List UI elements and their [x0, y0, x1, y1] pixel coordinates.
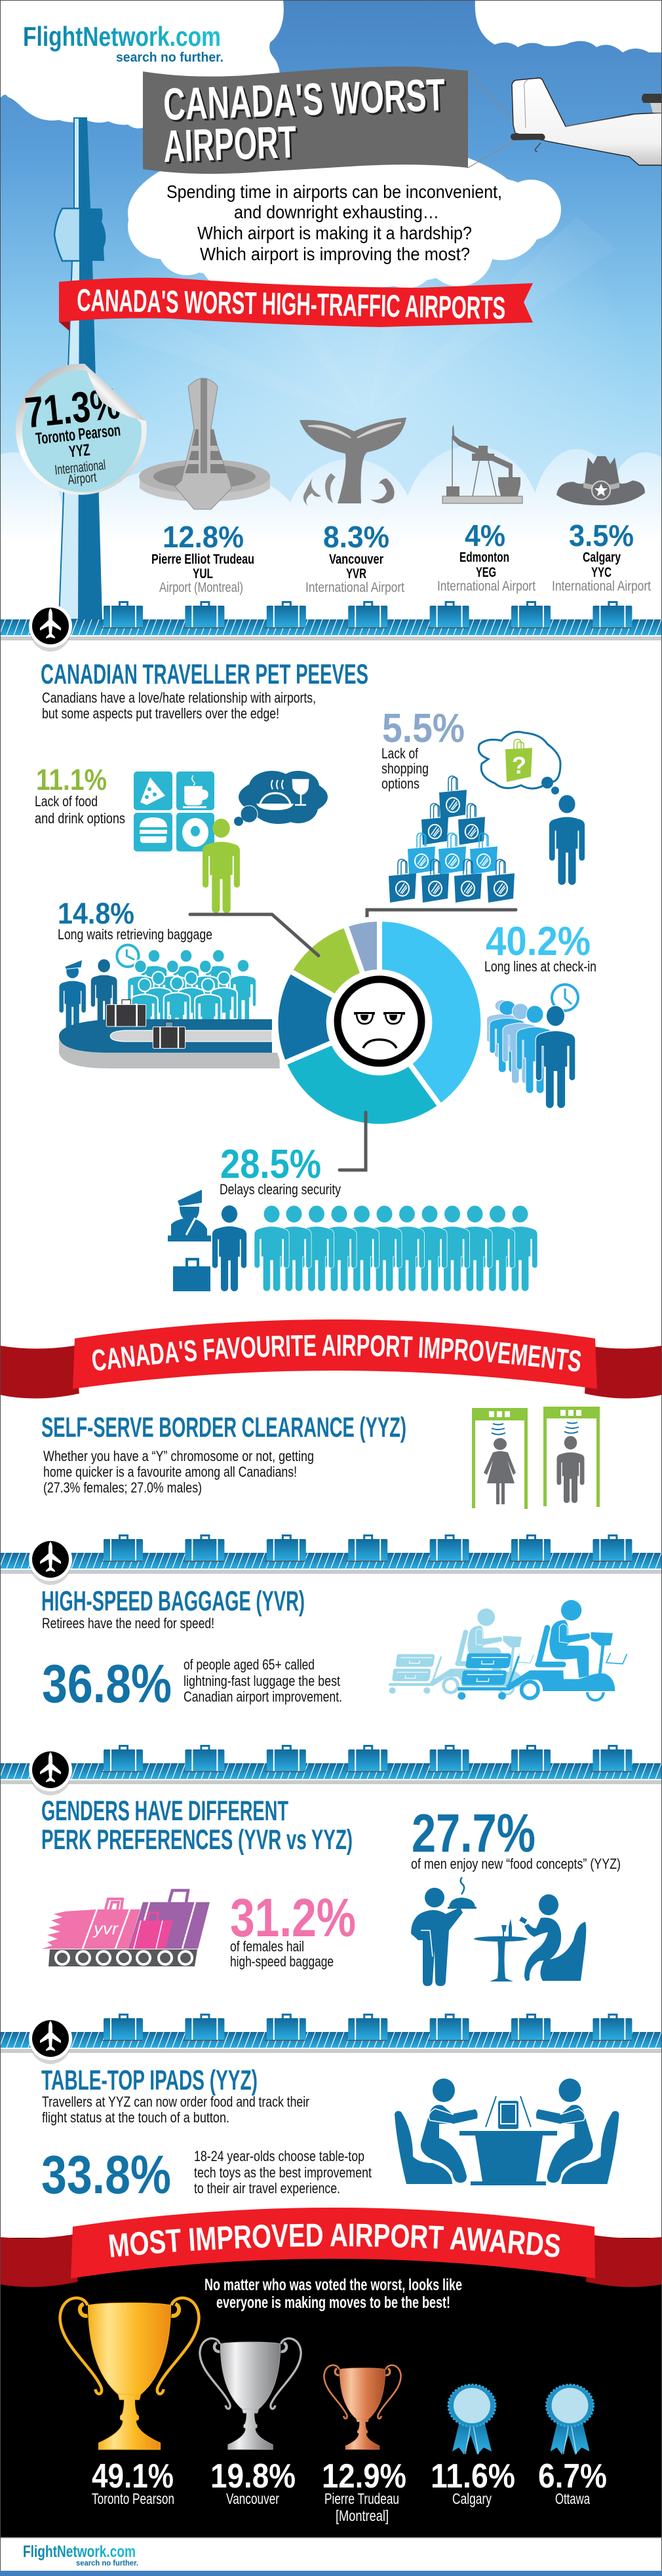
callout lines and baggage label — [58, 897, 516, 943]
callout: shopping 5.5%: shopping — [381, 760, 429, 777]
heading: table-top ipads: TABLE-TOP IPADS (YYZ) — [41, 2065, 258, 2096]
stat: Edmonton 4%: 4% — [465, 518, 505, 553]
icon: Montreal Olympic stadium — [139, 378, 270, 509]
border clearance text: home quicker is a favourite among all Canadians! — [43, 1464, 297, 1480]
segment 14.8% baggage — [276, 971, 336, 1063]
callout: shopping 5.5%: Lack of — [381, 745, 419, 762]
sticker: Toronto Pearson 71.3%: YYZ — [68, 440, 91, 461]
stat: Vancouver 8.3%: Vancouver — [329, 552, 383, 567]
award: Pierre Trudeau: [Montreal] — [336, 2507, 389, 2524]
callout: security 28.5%: Delays clearing security — [220, 1181, 341, 1198]
carousel belt — [59, 1019, 280, 1068]
stat: Edmonton 4%: YEG — [476, 565, 496, 580]
pet peeves intro: Canadians have a love/hate relationship with airports, — [42, 690, 316, 706]
sticker: Toronto Pearson 71.3% — [16, 364, 147, 495]
callout: shopping 5.5%: options — [381, 775, 419, 792]
illustration: check-in queue — [487, 985, 578, 1108]
trophy: gold — [60, 2298, 199, 2449]
cafe table — [474, 1919, 528, 1981]
right seated person — [536, 2078, 619, 2184]
segment 28.5% security — [284, 1042, 440, 1127]
award: Calgary: Calgary — [452, 2490, 492, 2507]
callout: food 11.1%: Lack of food — [35, 793, 98, 810]
icon: food tiles — [134, 771, 214, 851]
callout: food 11.1%: and drink options — [35, 810, 125, 827]
logo: FlightNetwork.com: search no further. — [116, 50, 224, 65]
award: Pierre Trudeau — [322, 2457, 406, 2524]
intro text: Which airport is making it a hardship? — [197, 223, 472, 243]
pet peeves intro: but some aspects put travellers over the edge! — [42, 705, 279, 722]
icon: dining thought bubble — [234, 771, 328, 826]
sky background — [0, 0, 662, 524]
diner — [519, 1894, 586, 1981]
footer logo: search no further. — [76, 2558, 138, 2567]
stat: 33.8%: 18-24 year-olds choose table-top — [194, 2148, 364, 2164]
stat: 36.8%: lightning-fast luggage the best — [184, 1673, 340, 1689]
ipad — [486, 2096, 531, 2129]
donut chart: pet peeves — [276, 919, 483, 1127]
stat: 36.8%: of people aged 65+ called — [184, 1656, 315, 1673]
awards intro text: everyone is making moves to be the best! — [216, 2293, 450, 2312]
award: Toronto Pearson: 49.1% — [92, 2457, 174, 2495]
stat: 33.8%: 33.8% — [41, 2144, 171, 2205]
border clearance text: Whether you have a “Y” chromosome or not, getting — [43, 1448, 314, 1464]
icon: pyramid of shopping bags — [389, 776, 515, 903]
title: CANADA'S WORST — [163, 69, 446, 130]
stat: 36.8%: Canadian airport improvement. — [184, 1688, 342, 1705]
icon: shopping thought bubble: ? — [512, 752, 526, 779]
icon: oil pump jack — [442, 425, 522, 503]
black awards panel — [0, 2238, 662, 2537]
conveyor divider 3 — [0, 1745, 662, 1795]
stat: 31.2% females: high-speed baggage — [230, 1953, 334, 1970]
cloud: top right — [475, 0, 662, 52]
footer bar — [0, 2571, 662, 2576]
left seated person — [395, 2078, 478, 2184]
waiting crowd — [127, 949, 256, 1044]
callout: check-in 40.2%: 40.2% — [486, 919, 591, 964]
stat: Montreal 12.8%: 12.8% — [163, 520, 244, 554]
callout line: food to chart — [190, 914, 319, 956]
icon: man in scanner gate — [543, 1407, 600, 1507]
award: Calgary — [431, 2457, 515, 2507]
ribbon: favourite airport improvements: CANADA'S FAVOURITE AIRPORT IMPROVEMENTS — [92, 1335, 581, 1371]
title — [163, 69, 448, 174]
table-top text — [42, 2094, 309, 2126]
waiter — [411, 1877, 477, 1986]
award: Ottawa — [538, 2457, 607, 2507]
intro text — [166, 182, 502, 264]
callout: security 28.5% — [220, 1112, 366, 1198]
title: AIRPORT — [165, 119, 299, 174]
passenger at carousel — [91, 959, 117, 1025]
high-speed baggage text: Retirees have the need for speed! — [42, 1615, 214, 1631]
red banner: worst high-traffic airports — [59, 278, 533, 331]
passenger at desk — [212, 1205, 246, 1291]
heading: genders perk preferences: GENDERS HAVE DIFFERENT — [41, 1795, 288, 1827]
illustration: pink luggage on belt: yvr — [92, 1920, 119, 1938]
conveyor divider 4 — [0, 2014, 662, 2064]
teal queue — [254, 1205, 537, 1291]
conveyor divider 1 — [0, 601, 662, 652]
heading: genders perk preferences: PERK PREFERENCES (YVR vs YYZ) — [41, 1824, 353, 1856]
stat: Calgary 3.5%: 3.5% — [569, 518, 634, 553]
illustration: mobility scooters with luggage — [389, 1600, 627, 1700]
grey title banner — [143, 66, 468, 174]
officer at carousel — [59, 960, 86, 1030]
stat: 27.7% men: of men enjoy new “food concepts” (YYZ) — [411, 1856, 621, 1872]
callout lines and baggage label: 14.8% — [58, 897, 134, 930]
footer logo: FlightNetwork.com — [23, 2543, 136, 2561]
stat: 36.8%: 36.8% — [42, 1653, 172, 1714]
medal: Ottawa — [547, 2385, 594, 2455]
sticker: Toronto Pearson 71.3%: 71.3% — [23, 379, 123, 437]
illustration: security line — [168, 1190, 537, 1291]
stat: Edmonton 4% — [437, 518, 535, 594]
cloud: top left — [0, 0, 284, 128]
border clearance text — [43, 1448, 314, 1496]
stat: Montreal 12.8% — [151, 520, 254, 595]
title: CANADA'S WORST — [165, 71, 448, 132]
conveyor divider 2 — [0, 1534, 662, 1585]
segment 11.1% food — [290, 925, 363, 997]
stat: 33.8%: to their air travel experience. — [194, 2180, 340, 2196]
award: Ottawa: Ottawa — [555, 2490, 590, 2507]
CN tower — [54, 118, 106, 619]
callout: shopping 5.5%: 5.5% — [382, 706, 465, 751]
stat: Calgary 3.5%: Calgary — [583, 550, 621, 565]
sticker: Toronto Pearson 71.3%: Toronto Pearson — [35, 421, 121, 448]
heading: self-serve border clearance: SELF-SERVE BORDER CLEARANCE (YYZ) — [41, 1412, 406, 1443]
intro text: and downright exhausting… — [234, 202, 439, 222]
logo: FlightNetwork.com — [23, 21, 224, 65]
intro text: Spending time in airports can be inconvenient, — [166, 182, 502, 202]
ribbon: most improved airport awards: MOST IMPROVED AIRPORT AWARDS — [109, 2223, 560, 2257]
sticker: Toronto Pearson 71.3%: Airport — [67, 470, 98, 488]
stat: Vancouver 8.3%: International Airport — [305, 580, 404, 595]
callout: food 11.1% — [35, 763, 125, 827]
logo: FlightNetwork.com: FlightNetwork.com — [23, 21, 221, 52]
awards intro text — [204, 2276, 462, 2312]
plane — [468, 71, 662, 168]
award: Toronto Pearson: Toronto Pearson — [92, 2490, 174, 2507]
award: Vancouver — [210, 2457, 296, 2507]
trophy: bronze — [324, 2365, 401, 2449]
title: AIRPORT — [163, 117, 297, 172]
icon: woman in scanner gate — [472, 1408, 528, 1509]
callout: security 28.5%: 28.5% — [220, 1142, 321, 1187]
footer logo — [0, 2537, 662, 2567]
heading: pet peeves: CANADIAN TRAVELLER PET PEEVES — [41, 659, 368, 690]
award: Vancouver: Vancouver — [226, 2490, 279, 2507]
cloud: behind intro text — [128, 136, 561, 290]
stat: Calgary 3.5%: YYC — [591, 565, 612, 580]
heading: high-speed baggage: HIGH-SPEED BAGGAGE (YVR) — [41, 1586, 305, 1617]
stat: Calgary 3.5% — [552, 518, 651, 594]
clock icon — [117, 945, 139, 967]
segment 5.5% shopping — [345, 919, 380, 975]
border clearance text: (27.3% females; 27.0% males) — [43, 1479, 202, 1496]
icon: shopping thought bubble — [478, 732, 560, 794]
callout: shopping 5.5% — [381, 706, 465, 792]
callout lines and baggage label: Long waits retrieving baggage — [58, 926, 212, 943]
awards intro text: No matter who was voted the worst, looks like — [204, 2276, 462, 2294]
trophy: silver — [200, 2339, 301, 2449]
award: Ottawa: 6.7% — [538, 2457, 607, 2495]
stat: Edmonton 4%: International Airport — [437, 579, 535, 594]
icon: unhappy face — [338, 979, 421, 1063]
pet peeves intro — [42, 690, 316, 722]
heading: genders perk preferences — [41, 1795, 353, 1856]
table-top text: flight status at the touch of a button. — [42, 2109, 229, 2126]
illustration: baggage carousel and crowd — [59, 945, 280, 1068]
stat: Montreal 12.8%: Airport (Montreal) — [159, 580, 243, 595]
award: Calgary: 11.6% — [431, 2457, 515, 2495]
award: Vancouver: 19.8% — [210, 2457, 296, 2495]
stat: Vancouver 8.3%: 8.3% — [323, 520, 389, 554]
stat: 27.7% men — [411, 1803, 621, 1872]
security officer — [168, 1190, 211, 1241]
icon: whale tail — [300, 418, 406, 506]
ribbon: most improved airport awards — [1, 2208, 661, 2288]
stat: Vancouver 8.3%: YVR — [346, 566, 366, 581]
sticker: Toronto Pearson 71.3%: International — [54, 458, 106, 478]
stat: Montreal 12.8%: YUL — [193, 566, 213, 581]
callout: check-in 40.2%: Long lines at check-in — [484, 958, 596, 975]
illustration: waiter and diner — [411, 1877, 586, 1986]
icon: green man thinking of food — [203, 819, 240, 913]
award: Pierre Trudeau: 12.9% — [322, 2457, 406, 2495]
stat: Edmonton 4%: Edmonton — [459, 550, 509, 565]
suitcases on carousel — [106, 1000, 185, 1048]
award: Toronto Pearson — [92, 2457, 174, 2507]
ribbon: favourite airport improvements — [1, 1319, 661, 1399]
icon: cowboy hat — [556, 456, 645, 505]
table-top text: Travellers at YYZ can now order food and track their — [42, 2094, 309, 2110]
stat: Montreal 12.8%: Pierre Elliot Trudeau — [151, 552, 254, 567]
illustration: pink luggage on belt — [42, 1890, 210, 1966]
stat: 31.2% females: of females hail — [230, 1938, 304, 1955]
illustration: two people with ipad at table — [395, 2078, 619, 2185]
stat: 36.8% — [42, 1653, 342, 1714]
stat: 31.2% females — [230, 1887, 356, 1970]
intro text: Which airport is improving the most? — [200, 244, 470, 264]
table — [459, 2131, 557, 2185]
suitcase — [173, 1259, 210, 1291]
stat: Vancouver 8.3% — [305, 520, 404, 595]
stat: 27.7% men: 27.7% — [412, 1803, 535, 1864]
callout: food 11.1%: 11.1% — [36, 763, 107, 796]
icon: man thinking about shopping — [549, 795, 585, 885]
medal: Calgary — [448, 2385, 496, 2455]
segment 40.2% check-in — [380, 919, 483, 1106]
stat: 33.8%: tech toys as the best improvement — [194, 2164, 372, 2181]
horizon clouds — [0, 446, 662, 623]
award: Pierre Trudeau: Pierre Trudeau — [324, 2490, 399, 2507]
stat: 31.2% females: 31.2% — [230, 1887, 356, 1948]
stat: 33.8% — [41, 2144, 372, 2205]
